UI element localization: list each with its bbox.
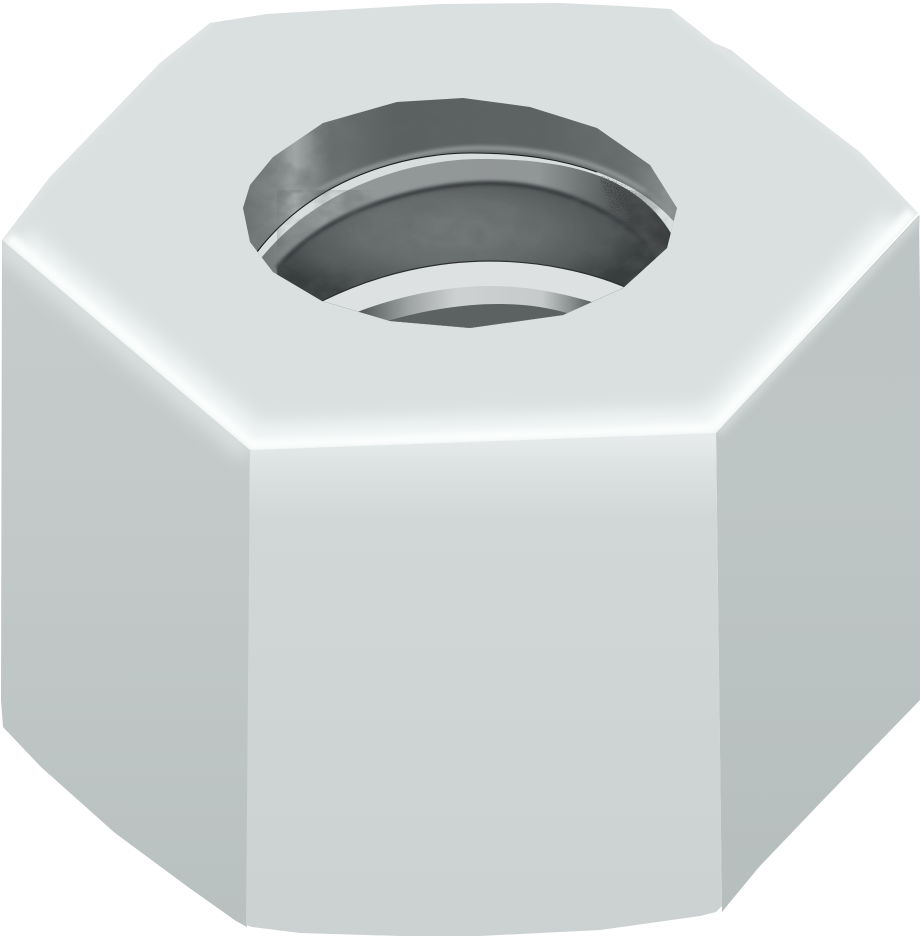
top face bbox=[2, 3, 918, 450]
black ridge line bbox=[257, 153, 597, 252]
light ridge ring bbox=[258, 154, 674, 274]
deepest opening bbox=[388, 304, 567, 328]
glow above the ridge bbox=[312, 144, 662, 206]
ring edge shadow bbox=[322, 261, 625, 301]
inner wall shading bbox=[277, 183, 647, 268]
right face bbox=[716, 212, 920, 912]
grey thread band bbox=[262, 159, 671, 306]
upper wall shading bbox=[243, 103, 677, 238]
upper wall bbox=[240, 95, 680, 330]
front face bbox=[246, 433, 722, 936]
inner wall mottling bbox=[277, 190, 667, 300]
lower thread band bbox=[358, 286, 592, 328]
left face bbox=[0, 240, 250, 927]
chamfer highlight bbox=[2, 99, 918, 450]
inner wall bbox=[277, 183, 662, 340]
threaded hole bbox=[240, 95, 680, 340]
speckled thread area bbox=[600, 176, 670, 240]
lower white ring bbox=[322, 262, 624, 328]
